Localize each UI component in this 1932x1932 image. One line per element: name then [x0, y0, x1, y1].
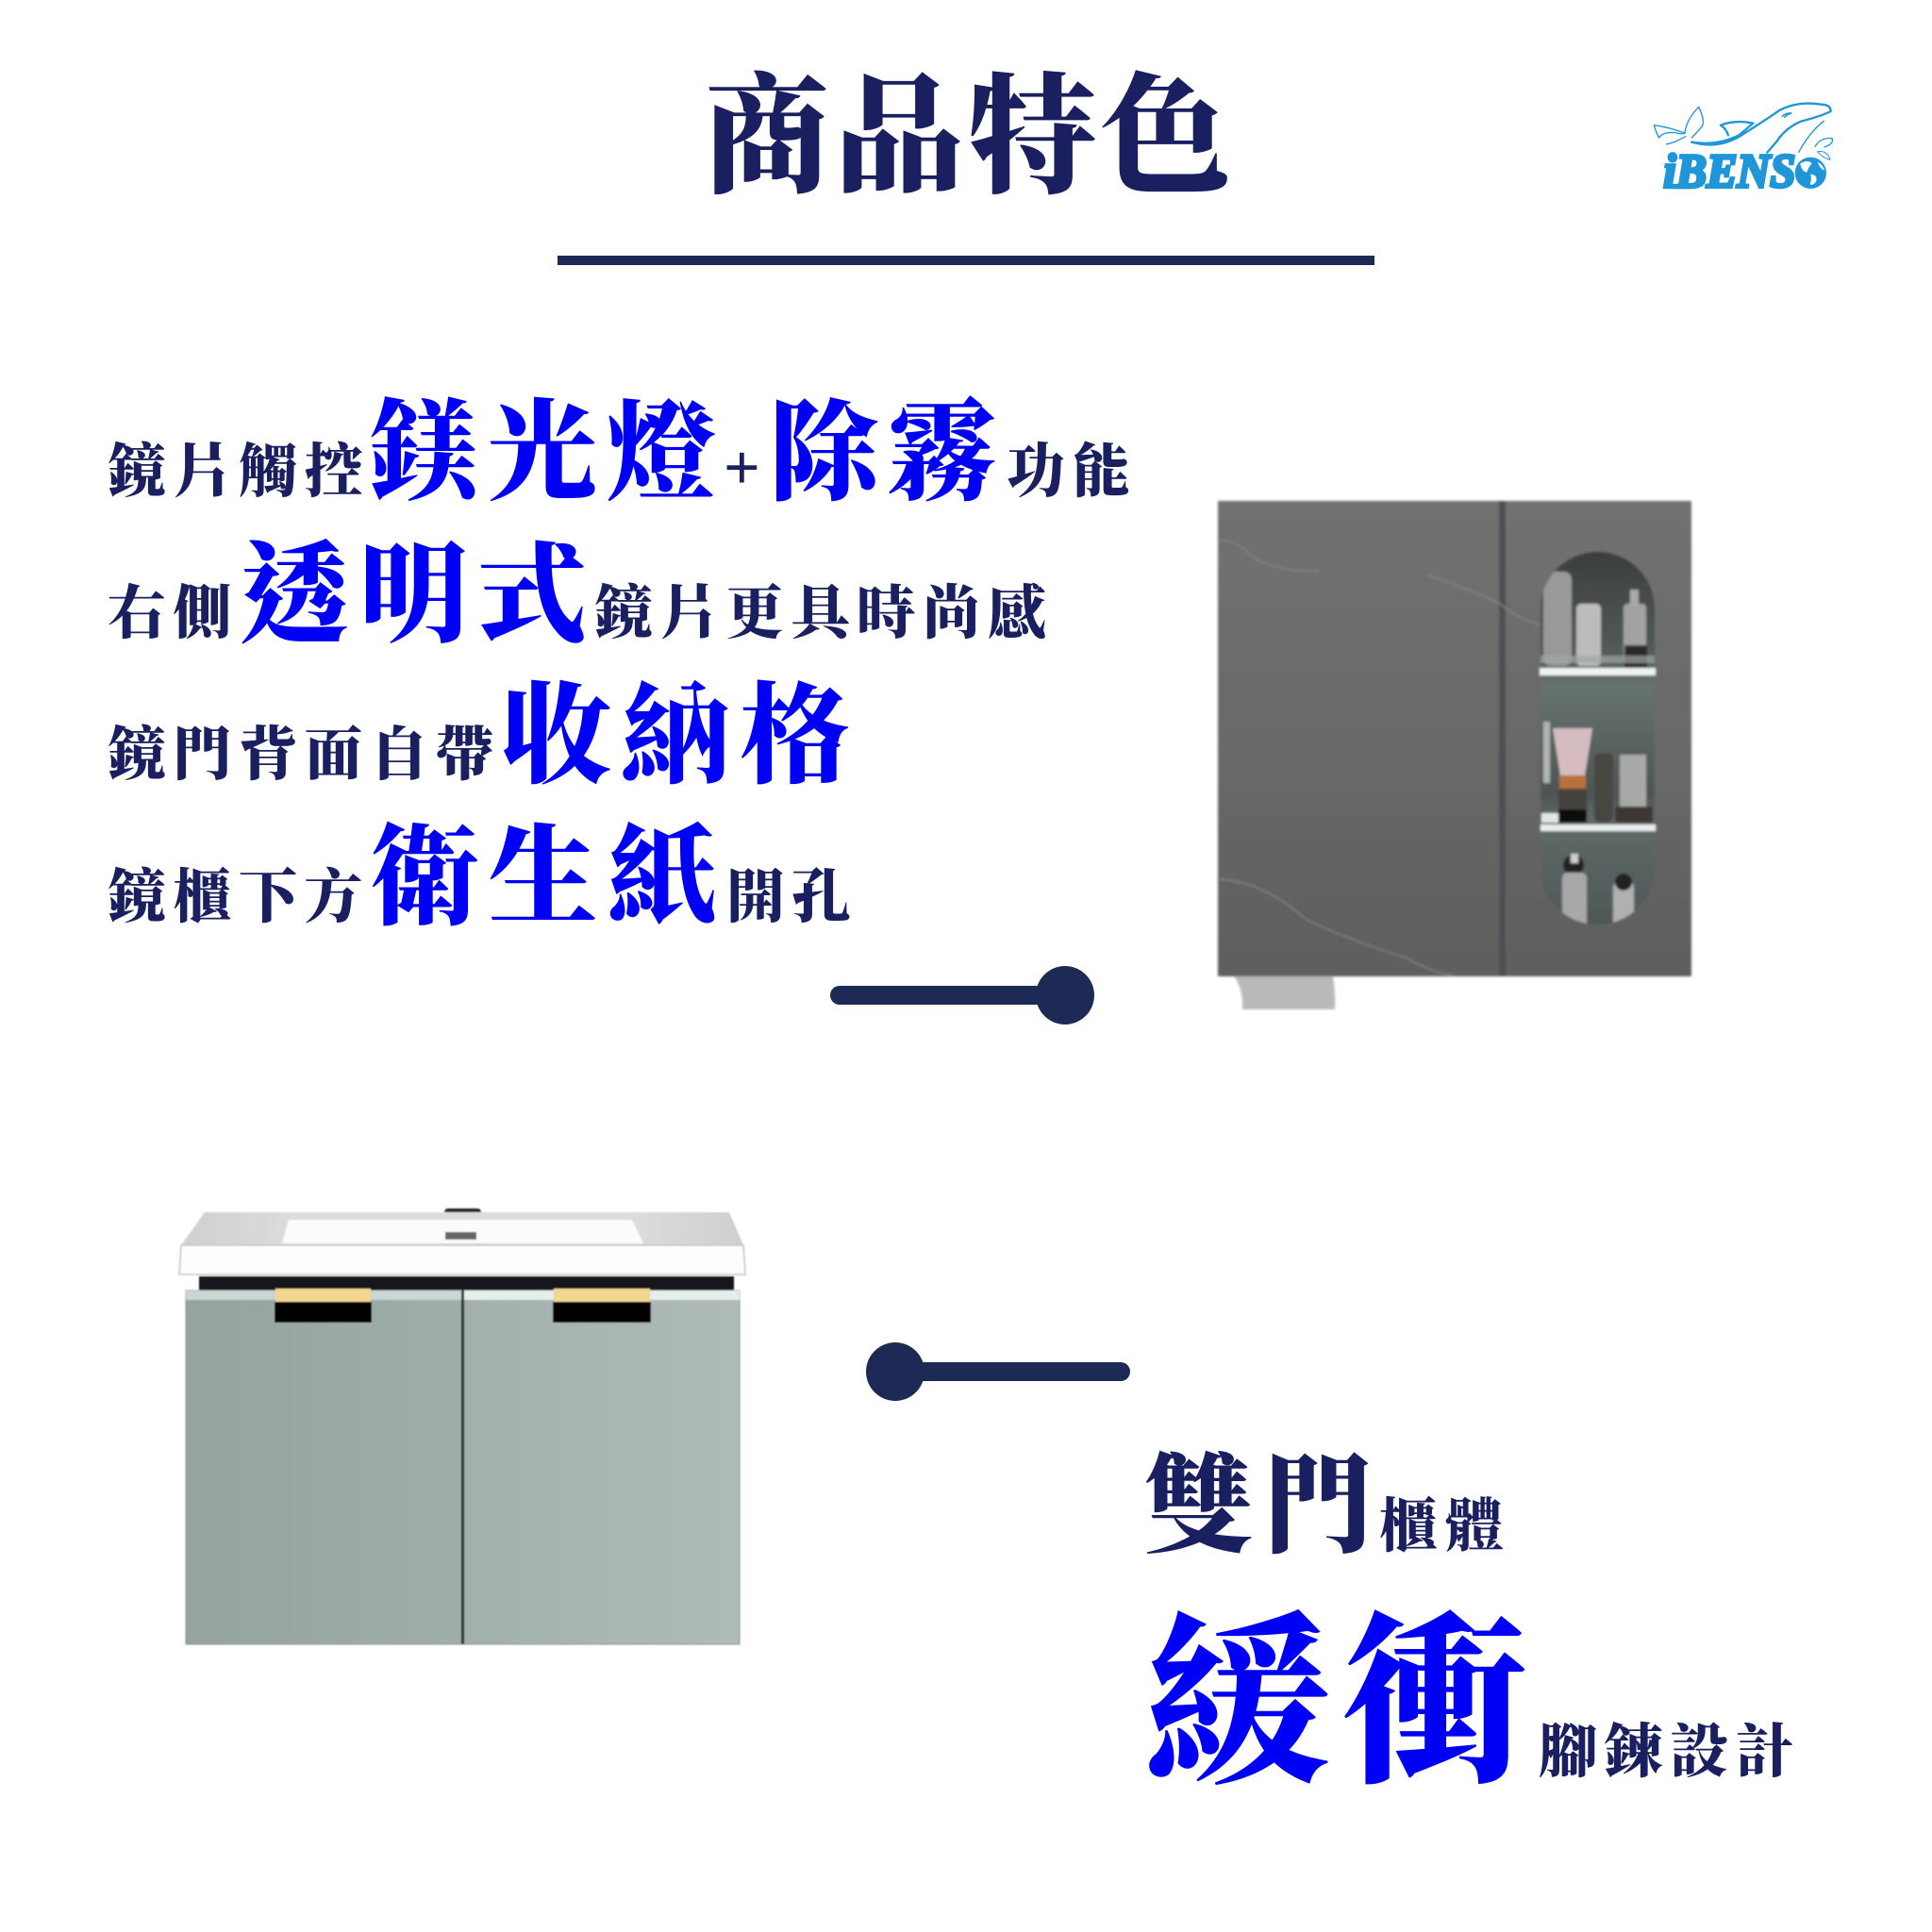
highlight text: 衛生紙: [370, 819, 726, 940]
small text: 鏡片更具時尚感: [594, 582, 1054, 646]
highlight text: 雙門: [1144, 1447, 1384, 1567]
small text: 櫃體: [1379, 1495, 1510, 1559]
cabinet body: [1218, 501, 1691, 976]
door gap: [1499, 501, 1506, 976]
highlight text: 除霧: [769, 394, 1007, 515]
handles: [275, 1302, 372, 1323]
light strips: [1540, 668, 1656, 675]
black gap: [199, 1276, 734, 1291]
small text: 功能: [1007, 441, 1138, 505]
image: mirror cabinet: [1216, 499, 1693, 1011]
faucet: [444, 1208, 481, 1219]
feature line 2: [108, 537, 1054, 658]
highlight text: 收納格: [502, 677, 858, 798]
small text: 鏡片觸控: [108, 441, 370, 505]
left door: [186, 1291, 461, 1644]
logo globe: [1795, 158, 1826, 189]
basin top: [181, 1212, 743, 1245]
feature line 3: [108, 677, 858, 798]
small text: 開孔: [726, 866, 858, 930]
title: 商品特色: [701, 66, 1233, 210]
highlight text: 透明式: [240, 537, 596, 658]
highlight text: 鎂光燈: [369, 394, 725, 515]
niche shelves: [1541, 552, 1655, 929]
logo: iBENSO dolphin: [1653, 102, 1834, 198]
tissue: [1234, 976, 1335, 1009]
feature line 1: [108, 394, 1138, 515]
basin front: [179, 1245, 745, 1274]
feature text: double door: [1144, 1447, 1510, 1567]
feature line 4: [108, 819, 858, 940]
small text: 腳鍊設計: [1539, 1721, 1801, 1785]
marble veins: [1219, 541, 1540, 975]
image: vanity cabinet: [177, 1208, 747, 1645]
small text: 鏡櫃下方: [108, 866, 370, 930]
title underline: [558, 256, 1374, 265]
small text: 右側: [108, 582, 239, 646]
logo wordmark: iBENS: [1663, 145, 1795, 198]
plus sign: +: [724, 431, 760, 503]
highlight text: 緩衝: [1145, 1604, 1541, 1807]
right door: [464, 1291, 740, 1644]
feature text: soft close: [1145, 1604, 1801, 1807]
small text: 鏡門背面自帶: [108, 724, 501, 788]
